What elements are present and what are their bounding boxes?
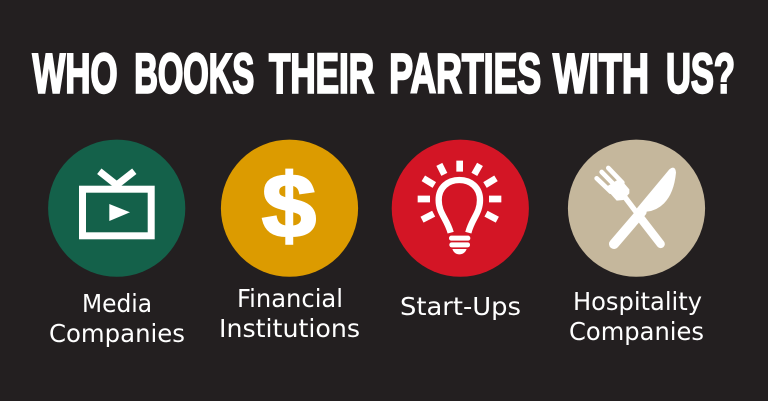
title: WITH (553, 41, 649, 104)
label: media companies (49, 289, 185, 348)
label: financial institutions (219, 284, 360, 343)
icon: television (82, 171, 151, 236)
title: THEIR (269, 41, 374, 104)
title: PARTIES (389, 41, 541, 104)
panel: start-ups (392, 140, 529, 321)
label: financial institutions: Institutions (219, 314, 360, 343)
title: BOOKS (134, 41, 254, 104)
panel: media companies (48, 140, 185, 348)
label: start-ups: Start-Ups (400, 292, 521, 321)
gold circle (221, 140, 358, 277)
label: financial institutions: Financial (237, 284, 343, 313)
red circle (392, 140, 529, 277)
title: WHO (32, 41, 118, 104)
label: hospitality companies: Hospitality (573, 287, 702, 316)
title (32, 41, 735, 104)
tan circle (568, 140, 705, 277)
label: media companies: Media (82, 289, 152, 318)
icon: dollar sign: $ (262, 155, 316, 256)
icon: fork and knife (597, 168, 676, 244)
green circle (48, 140, 185, 277)
panel: financial institutions (219, 140, 360, 343)
icon: light bulb (418, 161, 501, 254)
panel: hospitality companies (568, 140, 705, 346)
label: media companies: Companies (49, 319, 185, 348)
label: hospitality companies (569, 287, 704, 346)
label: hospitality companies: Companies (569, 317, 704, 346)
